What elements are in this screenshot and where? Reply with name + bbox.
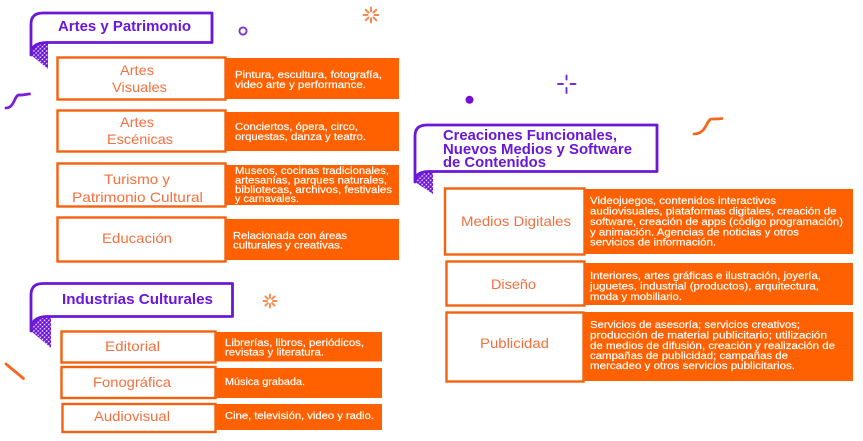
icon: purple cross [558,76,576,93]
heading banner: Industrias Culturales [31,284,232,348]
heading banner: Artes y Patrimonio [31,13,212,69]
row: Medios Digitales [445,188,853,254]
row: Turismo y Patrimonio Cultural: y carnavales. [235,194,299,205]
icon: orange sparkle middle [264,294,276,308]
row: Diseño: Interiores, artes gráficas e ilustración, joyería, [590,271,821,282]
row: Fonográfica [62,367,382,398]
row: Publicidad: campañas de publicidad; campañas de [590,351,788,362]
row: Diseño: juguetes, industrial (productos), arquitectura, [589,282,819,292]
heading banner: Creaciones Funcionales, Nuevos Medios y Software de Contenidos: Nuevos Medios y Software [443,141,632,158]
row: Diseño: Diseño [491,276,536,292]
icon: purple ring [239,27,247,35]
section: Artes y Patrimonio [31,13,399,262]
row: Editorial [62,332,382,362]
row: Artes Escénicas: Escénicas [107,131,173,147]
row: Medios Digitales: y animación. Agencias de noticias y otros [590,228,799,238]
row: Audiovisual [62,404,382,432]
icon: orange sparkle top [364,8,378,22]
heading banner: Artes y Patrimonio: Artes y Patrimonio [58,18,191,35]
heading banner: Creaciones Funcionales, Nuevos Medios y Software de Contenidos: Creaciones Funcionales, [443,127,617,144]
row: Artes Escénicas [58,110,399,152]
row: Turismo y Patrimonio Cultural: Turismo y [104,171,170,187]
row: Publicidad: producción de material publicitario; utilización [590,330,827,342]
heading banner: Industrias Culturales: Industrias Culturales [62,291,213,308]
icon: orange squiggle [694,118,722,134]
row: Fonográfica: Música grabada. [225,377,305,388]
icon: orange slash [6,364,24,378]
row: Diseño [446,262,853,306]
row: Educación: culturales y creativas. [233,240,343,252]
row: Artes Escénicas: Conciertos, ópera, circo, [235,122,358,133]
row: Artes Visuales: Visuales [112,79,167,95]
icon: purple dot [466,96,474,104]
row: Educación [58,218,399,262]
row: Artes Escénicas: Artes [120,114,154,130]
row: Editorial: Librerías, libros, periódicos, [225,338,364,349]
section: Creaciones Funcionales [415,125,853,382]
row: Medios Digitales: servicios de información. [590,238,716,248]
row: Artes Visuales: video arte y performance. [235,80,366,91]
row: Educación: Educación [102,230,172,246]
row: Medios Digitales: audiovisuales, plataformas digitales, creación de [590,206,837,218]
row: Turismo y Patrimonio Cultural: artesanías, parques naturales, [235,176,387,186]
row: Editorial: Editorial [105,338,160,354]
row: Medios Digitales: Videojuegos, contenidos interactivos [590,196,776,207]
heading banner: Creaciones Funcionales, Nuevos Medios y Software de Contenidos: de Contenidos [443,154,546,171]
row: Audiovisual: Audiovisual [94,408,170,424]
row: Editorial: revistas y literatura. [225,348,324,358]
row: Turismo y Patrimonio Cultural: Museos, cocinas tradicionales, [235,166,389,177]
row: Medios Digitales: software, creación de apps (código programación) [590,217,843,228]
row: Audiovisual: Cine, televisión, video y radio. [225,411,374,422]
row: Diseño: moda y mobiliario. [590,292,682,303]
row: Artes Visuales: Pintura, escultura, fotografía, [235,70,382,81]
row: Artes Visuales: Artes [120,62,154,78]
row: Turismo y Patrimonio Cultural: bibliotecas, archivos, festivales [235,185,392,196]
row: Publicidad [446,312,853,382]
row: Publicidad: de medios de difusión, creación y realización de [590,341,835,352]
icon: purple squiggle [6,94,30,108]
row: Medios Digitales: Medios Digitales [461,213,571,229]
section: Industrias Culturales [31,284,382,432]
row: Artes Escénicas: orquestas, danza y teatro. [235,132,366,143]
row: Turismo y Patrimonio Cultural: Patrimonio Cultural [72,189,203,205]
row: Publicidad: Servicios de asesoría; servicios creativos; [590,320,800,331]
row: Artes Visuales [58,58,399,100]
row: Turismo y Patrimonio Cultural [58,164,399,206]
row: Publicidad: mercadeo y otros servicios publicitarios. [590,361,795,372]
row: Fonográfica: Fonográfica [93,374,171,390]
heading banner: Creaciones Funcionales, Nuevos Medios y Software de Contenidos [415,125,657,194]
row: Educación: Relacionada con áreas [233,231,347,242]
row: Publicidad: Publicidad [480,335,549,351]
